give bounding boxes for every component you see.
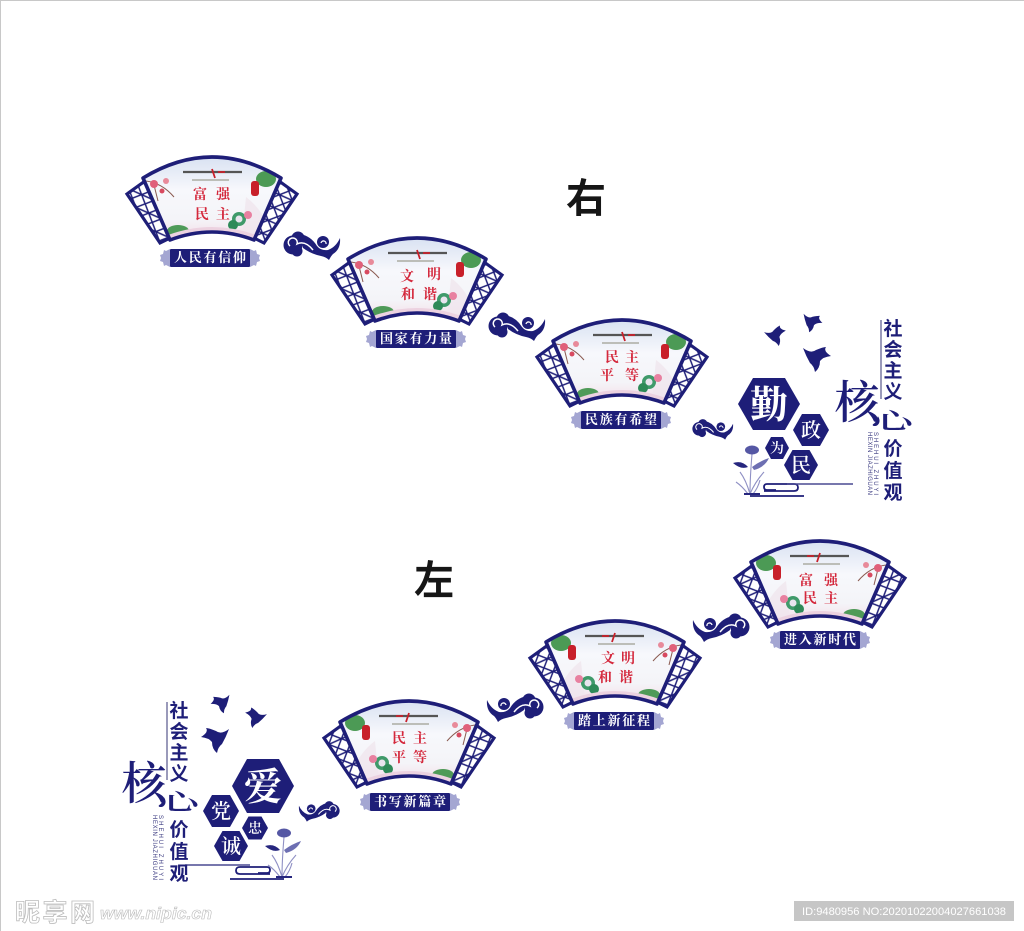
label band: 国家有力量: 国家有力量 bbox=[380, 331, 452, 346]
icon: cloud 3 bbox=[692, 419, 733, 440]
watermark logo bbox=[15, 899, 212, 927]
icon: birds bbox=[764, 313, 831, 372]
panel: fan 文明和谐 upper: 文 bbox=[400, 269, 414, 285]
hexagon: 诚 bbox=[214, 831, 248, 861]
divider rule bbox=[185, 864, 250, 866]
hexagon: 为: 为 bbox=[770, 440, 784, 457]
hexagon: 民: 民 bbox=[791, 454, 811, 477]
panel: fan 民主平等 lower: 等 bbox=[413, 749, 427, 766]
panel: fan 富强民主 upper: 富 bbox=[193, 186, 207, 203]
hexagon: 民 bbox=[784, 450, 818, 480]
text: 社会主义: 社 bbox=[883, 317, 903, 340]
icon: lotus bbox=[265, 828, 301, 877]
text: 社会主义: 主 bbox=[169, 742, 189, 764]
text: 价值观: 价 bbox=[169, 819, 189, 841]
icon: birds bbox=[201, 694, 267, 753]
hexagon: 党: 党 bbox=[211, 800, 231, 823]
hexagon: 政 bbox=[793, 414, 829, 446]
panel: fan 富强民主 upper: 主 bbox=[216, 207, 230, 223]
panel: fan 富强民主 lower: 主 bbox=[824, 591, 838, 607]
panel: fan 文明和谐 upper: 明 bbox=[427, 267, 441, 283]
panel: fan 民主平等 upper: 平 bbox=[600, 367, 614, 384]
icon: scroll cloud line bbox=[750, 484, 804, 496]
panel: fan 富强民主 lower bbox=[735, 541, 905, 631]
text: pinyin bbox=[866, 432, 878, 495]
text: 社会主义: 会 bbox=[169, 721, 189, 743]
icon: cloud 6 bbox=[299, 801, 340, 822]
label band: 进入新时代: 进入新时代 bbox=[784, 632, 856, 647]
panel: fan 民主平等 lower: 平 bbox=[392, 749, 406, 766]
watermark id box bbox=[794, 901, 1014, 921]
watermark id box: ID:9480956 NO:20201022004027661038 bbox=[802, 906, 1006, 918]
label band: 人民有信仰 bbox=[160, 249, 260, 267]
panel: fan 富强民主 lower: 民 bbox=[803, 591, 817, 607]
label band: 书写新篇章: 书写新篇章 bbox=[374, 794, 446, 809]
text: 价值观: 观 bbox=[883, 483, 903, 504]
panel: fan 文明和谐 lower: 文 bbox=[601, 651, 615, 667]
label band: 人民有信仰: 人民有信仰 bbox=[174, 250, 246, 265]
panel: fan 文明和谐 lower: 谐 bbox=[619, 669, 633, 686]
icon: lotus bbox=[733, 446, 769, 494]
panel: fan 民主平等 lower: 民 bbox=[392, 731, 406, 747]
label band: 民族有希望: 民族有希望 bbox=[585, 412, 657, 427]
panel: fan 文明和谐 upper: 谐 bbox=[423, 286, 437, 303]
vertical rule bbox=[166, 702, 168, 780]
divider rule bbox=[787, 483, 853, 485]
hexagon: 忠: 忠 bbox=[248, 820, 263, 837]
label band: 踏上新征程 bbox=[564, 712, 664, 730]
text: 社会主义: 义 bbox=[883, 381, 903, 403]
text: 价值观 bbox=[883, 438, 903, 504]
text: 社会主义: 会 bbox=[883, 339, 903, 361]
hexagon: 爱: 爱 bbox=[243, 767, 282, 809]
panel: fan 富强民主 lower: 富 bbox=[799, 572, 813, 589]
text: 心: 心 bbox=[871, 409, 917, 434]
hexagon: 勤: 勤 bbox=[750, 385, 788, 427]
text: 价值观: 价 bbox=[883, 438, 903, 460]
text: 社会主义: 社 bbox=[169, 699, 189, 722]
panel: fan 富强民主 upper bbox=[127, 157, 297, 247]
heading: 右: 右 bbox=[566, 177, 606, 221]
text: pinyin bbox=[151, 815, 163, 880]
text: pinyin: SHEHUI ZHUYI bbox=[157, 815, 163, 880]
text: 价值观: 观 bbox=[169, 864, 189, 885]
text: 价值观: 值 bbox=[883, 460, 903, 482]
panel: fan 民主平等 upper bbox=[537, 320, 707, 410]
label band: 民族有希望 bbox=[571, 411, 671, 429]
label band: 踏上新征程: 踏上新征程 bbox=[578, 713, 650, 728]
text: 社会主义 bbox=[169, 699, 189, 785]
hexagon: 勤 bbox=[738, 378, 800, 430]
panel: core values left bbox=[121, 694, 301, 885]
panel: fan 富强民主 lower: 强 bbox=[824, 573, 840, 589]
panel: fan 富强民主 upper: 民 bbox=[195, 207, 209, 223]
panel: fan 文明和谐 lower bbox=[530, 621, 700, 711]
text: 社会主义: 主 bbox=[883, 360, 903, 382]
text: 价值观: 值 bbox=[169, 841, 189, 863]
icon: scroll cloud line bbox=[230, 867, 284, 879]
text: pinyin: SHEHUI ZHUYI bbox=[872, 432, 878, 495]
icon: cloud 5 bbox=[487, 694, 544, 722]
hexagon: 诚: 诚 bbox=[221, 835, 241, 858]
label band: 书写新篇章 bbox=[360, 793, 460, 811]
text: 社会主义 bbox=[883, 317, 903, 403]
text: pinyin: HEXIN JIAZHIGUAN bbox=[866, 432, 872, 495]
panel: fan 文明和谐 lower: 和 bbox=[598, 670, 612, 686]
panel: fan 民主平等 upper: 主 bbox=[625, 350, 639, 366]
label band: 进入新时代 bbox=[770, 631, 870, 649]
text: 社会主义: 义 bbox=[169, 763, 189, 785]
text: 心: 心 bbox=[157, 790, 203, 815]
watermark logo: 昵享网 bbox=[15, 899, 95, 927]
label band: 国家有力量 bbox=[366, 330, 466, 348]
text: 核: 核 bbox=[121, 759, 169, 809]
hexagon: 党 bbox=[203, 795, 239, 827]
hexagon: 爱 bbox=[232, 759, 294, 813]
panel: fan 民主平等 upper: 等 bbox=[625, 367, 639, 384]
icon: cloud 4 bbox=[693, 614, 750, 642]
hexagon: 政: 政 bbox=[801, 419, 821, 442]
text: 价值观 bbox=[169, 819, 189, 885]
heading: 左: 左 bbox=[414, 559, 454, 603]
panel: fan 民主平等 lower bbox=[324, 701, 494, 791]
panel: fan 文明和谐 upper: 和 bbox=[401, 287, 415, 303]
text: 核: 核 bbox=[834, 378, 882, 428]
vertical rule bbox=[880, 320, 882, 399]
panel: core values right bbox=[733, 313, 917, 504]
icon: cloud 1 bbox=[284, 232, 340, 260]
hexagon: 忠 bbox=[242, 816, 268, 840]
panel: fan 富强民主 upper: 强 bbox=[216, 187, 232, 203]
panel: fan 文明和谐 lower: 明 bbox=[621, 651, 635, 667]
panel: fan 民主平等 upper: 民 bbox=[605, 350, 619, 366]
watermark logo: www.nipic.cn bbox=[100, 904, 212, 923]
hexagon: 为 bbox=[765, 437, 789, 459]
icon: cloud 2 bbox=[488, 312, 545, 341]
panel: fan 民主平等 lower: 主 bbox=[413, 731, 427, 747]
text: pinyin: HEXIN JIAZHIGUAN bbox=[151, 815, 157, 880]
panel: fan 文明和谐 upper bbox=[332, 238, 502, 328]
